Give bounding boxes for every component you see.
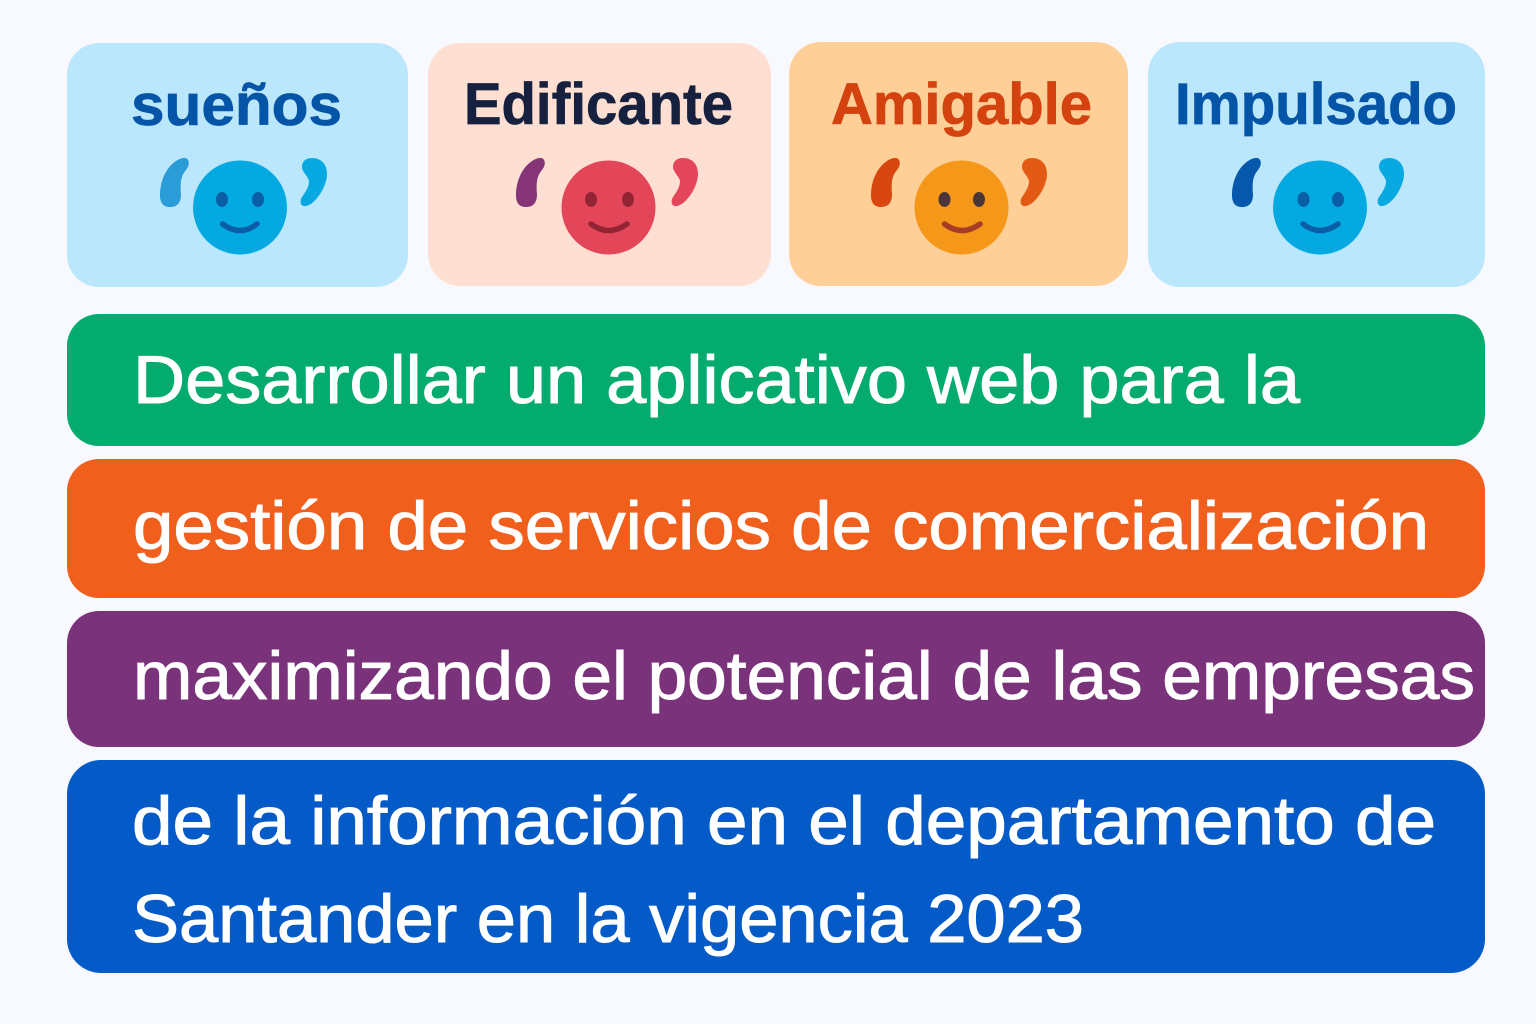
text: line 2: gestión de servicios de comercialización [133,488,1429,564]
text: line 5: Santander en la vigencia 2023 [132,881,1084,957]
heading: Amigable: Amigable [831,72,1092,137]
text: line 4: de la información en el departamento de [132,783,1436,859]
banner: green [67,314,1485,446]
banner: blue [67,760,1485,973]
heading: sueños: sueños [131,73,342,138]
panel: sueños [67,43,408,287]
heading: Edificante: Edificante [464,72,733,137]
heading: Impulsado: Impulsado [1175,72,1457,137]
icon: smiley sueños [160,158,327,254]
text: line 3: maximizando el potencial de las empresas [133,638,1475,714]
icon: smiley Impulsado [1232,158,1404,254]
panel: Amigable [789,42,1128,286]
icon: smiley Amigable [871,158,1047,254]
banner: orange [67,459,1485,598]
banner: purple [67,611,1485,747]
icon: smiley Edificante [516,158,698,254]
text: line 1: Desarrollar un aplicativo web para la [133,342,1300,418]
panel: Edificante [428,43,771,286]
panel: Impulsado [1148,42,1485,287]
